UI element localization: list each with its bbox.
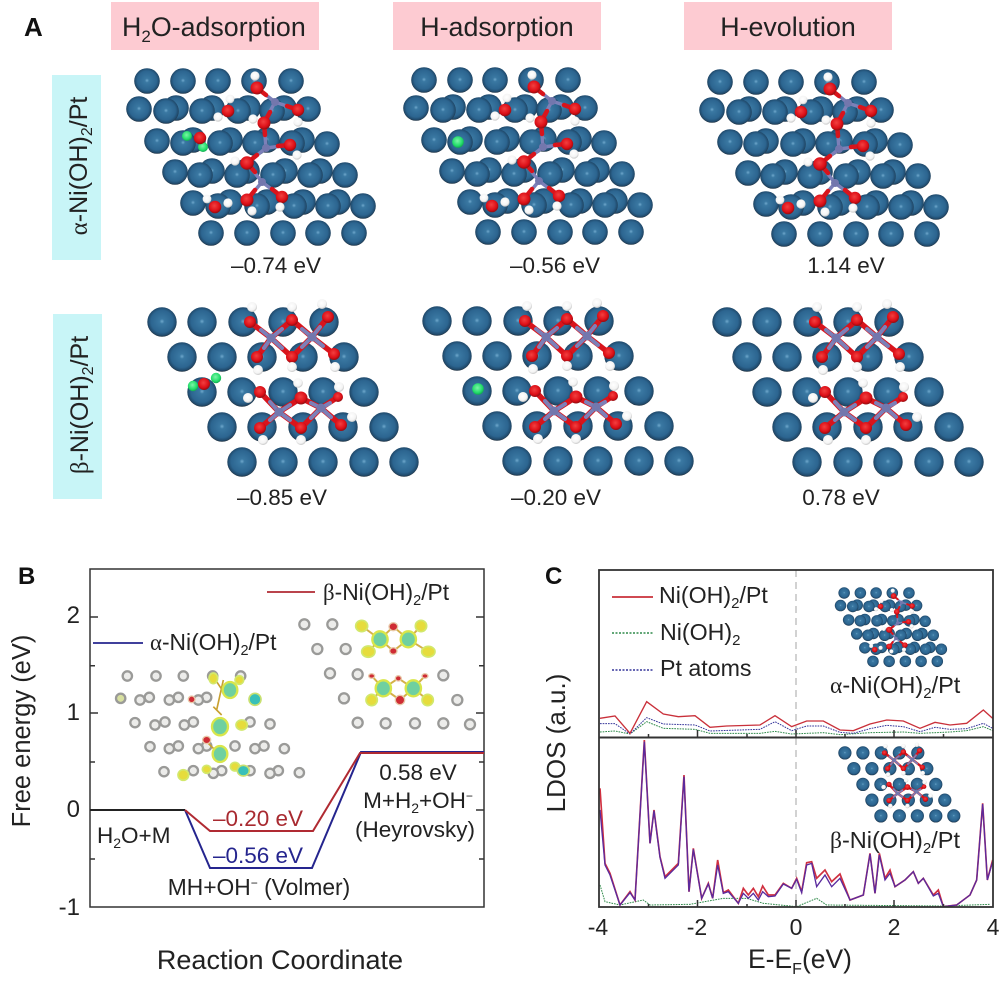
plot frame with divider and ticks: [599, 570, 993, 907]
state label: H2O+M: 2: [113, 835, 121, 851]
legend: Ni(OH)2: Ni(OH): [660, 619, 732, 645]
inset: beta structure: [838, 743, 960, 823]
row label: beta-Ni(OH)2/Pt: β-Ni(OH): [66, 375, 94, 474]
x axis title: F: [792, 961, 802, 978]
x axis tick labels: 0: [790, 914, 802, 940]
row label: alpha-Ni(OH)2/Pt: [52, 75, 101, 260]
y axis tick labels: [59, 602, 80, 921]
energy value: alpha H evolution: 1.14 eV: [807, 253, 885, 278]
top LDOS curves: alpha: [600, 702, 993, 735]
state label: Volmer: MH+OH: [168, 874, 251, 900]
row label: beta-Ni(OH)2/Pt: [53, 314, 102, 499]
y axis title: Free energy (eV): [8, 635, 36, 827]
row label: beta-Ni(OH)2/Pt: /Pt: [66, 336, 94, 366]
energy label: -0.20 eV: –0.20 eV: [213, 806, 303, 831]
x axis title: Reaction Coordinate: [157, 945, 403, 975]
y axis title: LDOS (a.u.): [541, 674, 571, 812]
y axis tick labels: 2: [67, 602, 80, 629]
legend: beta: /Pt: [421, 579, 450, 605]
legend: Ni(OH)2/Pt: Ni(OH): [659, 582, 731, 608]
structure: beta H evolution: [712, 299, 984, 477]
x axis tick labels: 2: [888, 914, 900, 940]
state label: M+H2+OH-: 2: [411, 800, 419, 816]
heading: H-evolution: H-evolution: [720, 12, 856, 42]
panel A: adsorption structures: [52, 2, 984, 510]
row label: alpha-Ni(OH)2/Pt: 2: [79, 127, 96, 136]
inset label: beta: /Pt: [931, 827, 960, 853]
legend: Ni(OH)2: [612, 619, 740, 649]
legend: alpha: 2: [240, 643, 249, 659]
y axis tick labels: 0: [67, 796, 80, 823]
state label: Volmer: (Volmer): [258, 874, 350, 900]
heading: H2O-adsorption: H: [122, 12, 141, 42]
structure: alpha H adsorption: [403, 67, 653, 245]
y axis tick labels: 1: [67, 699, 80, 726]
panel C: LDOS plot: [541, 570, 1000, 978]
heading: H-evolution: [684, 2, 892, 50]
chart frame and ticks: [90, 569, 484, 907]
structure: beta H adsorption: [422, 298, 694, 476]
state label: H2O+M: H: [97, 823, 113, 848]
energy value: beta H: –0.20 eV: [511, 485, 601, 510]
structure: alpha H evolution: [699, 69, 949, 247]
legend: beta: β-Ni(OH): [323, 579, 413, 605]
state label: Volmer: −: [251, 876, 258, 890]
energy value: alpha H: –0.56 eV: [510, 253, 600, 278]
legend: Ni(OH)2/Pt: [612, 582, 768, 612]
charge density inset: alpha: [116, 671, 304, 780]
inset label: alpha: /Pt: [932, 672, 961, 698]
legend: Ni(OH)2/Pt: 2: [731, 595, 739, 612]
structure: alpha H2O adsorption: [126, 68, 376, 246]
panel label: C: C: [545, 563, 562, 590]
x axis tick labels: -2: [687, 914, 707, 940]
legend: alpha: [93, 629, 277, 659]
energy value: alpha H2O: –0.74 eV: [231, 253, 321, 278]
heading: H2O-adsorption: 2: [141, 27, 151, 46]
legend: beta: 2: [413, 593, 421, 609]
legend: alpha: /Pt: [249, 629, 277, 655]
y axis tick labels: -1: [59, 894, 80, 921]
row label: alpha-Ni(OH)2/Pt: /Pt: [65, 97, 93, 127]
energy label: 0.58 eV: 0.58 eV: [379, 760, 457, 785]
panel label: A: A: [24, 12, 43, 42]
state label: M+H2+OH-: M+H: [363, 788, 411, 813]
inset label: beta: 2: [923, 840, 931, 857]
panel B: free energy diagram: [8, 569, 484, 975]
state label: Heyrovsky: (Heyrovsky): [355, 817, 475, 842]
structure: beta H2O adsorption: [147, 299, 419, 477]
charge density inset: beta: [299, 619, 475, 729]
legend: Ni(OH)2/Pt: /Pt: [739, 582, 768, 608]
x axis title: E-E: [748, 944, 792, 974]
energy profile: baseline: [90, 809, 185, 811]
inset label: alpha: 2: [923, 685, 932, 702]
inset label: beta: β-Ni(OH): [830, 827, 923, 854]
legend: Ni(OH)2: 2: [732, 632, 740, 649]
energy profile: alpha: [185, 752, 484, 868]
heading: H-adsorption: H-adsorption: [420, 12, 574, 42]
energy label: -0.56 eV: –0.56 eV: [213, 843, 303, 868]
legend: Pt atoms: Pt atoms: [660, 655, 752, 681]
energy profile: beta: [185, 753, 484, 831]
energy value: beta H evolution: 0.78 eV: [802, 485, 880, 510]
inset: alpha structure: [835, 587, 947, 667]
state label: H2O+M: O+M: [121, 823, 170, 848]
panel label: B: B: [18, 563, 35, 590]
state label: M+H2+OH-: −: [466, 789, 473, 803]
bottom LDOS curves: beta: [600, 740, 993, 907]
heading: H-adsorption: [393, 2, 601, 50]
inset label: alpha: α-Ni(OH): [830, 672, 923, 699]
row label: beta-Ni(OH)2/Pt: 2: [80, 366, 97, 375]
heading: H2O-adsorption: O-adsorption: [151, 12, 306, 42]
energy value: beta H2O: –0.85 eV: [237, 485, 327, 510]
legend: alpha: α-Ni(OH): [150, 629, 240, 655]
Fermi level dashed line: [795, 570, 797, 907]
row label: alpha-Ni(OH)2/Pt: α-Ni(OH): [65, 136, 93, 235]
heading: H2O-adsorption: [111, 2, 319, 50]
legend: beta: [267, 579, 450, 609]
x axis tick labels: 4: [987, 914, 1000, 940]
legend: Pt atoms: [612, 655, 752, 681]
state label: M+H2+OH-: +OH: [419, 788, 466, 813]
x axis tick labels: [588, 914, 1000, 940]
x axis title: (eV): [802, 944, 852, 974]
x axis tick labels: -4: [588, 914, 608, 940]
